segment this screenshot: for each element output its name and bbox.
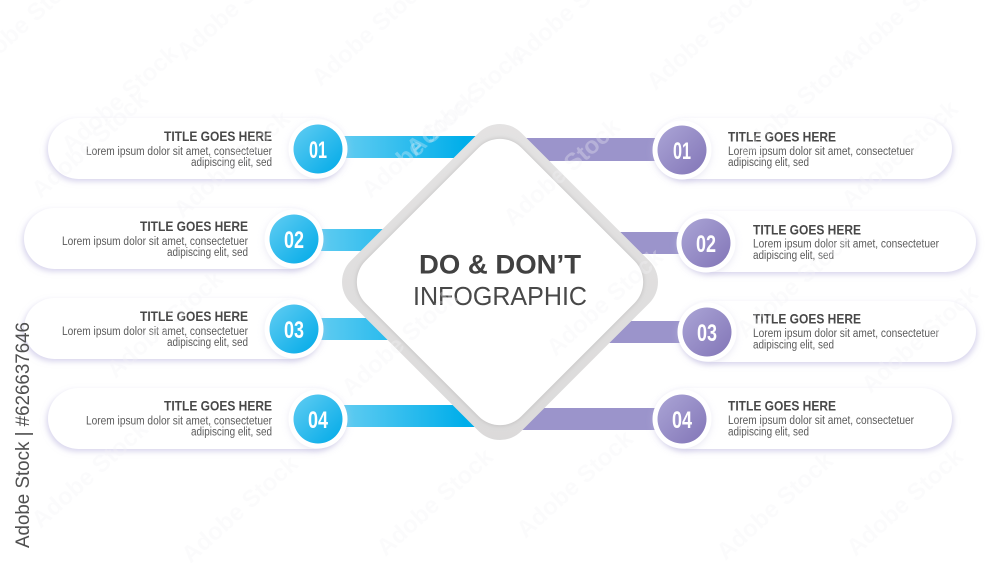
text: left 04: Lorem ipsum dolor sit amet, consectetuer <box>86 416 272 428</box>
panel: left item 04 <box>48 388 500 449</box>
connector bar: right 03 <box>500 321 684 343</box>
watermark pattern: Adobe Stock <box>168 105 296 224</box>
heading: do and don't: DO & DON’T <box>419 250 582 280</box>
text: left 02 <box>62 218 248 259</box>
watermark pattern: Adobe Stock <box>26 415 154 534</box>
badge: right 03: 03 <box>697 320 717 347</box>
text: right 02 <box>753 222 939 262</box>
text: right 04 <box>728 398 914 438</box>
connector bar: left 03 <box>316 318 500 340</box>
panel: right item 03 <box>500 301 976 362</box>
badge: left 02: 02 <box>284 227 304 254</box>
text: right 01: TITLE GOES HERE <box>728 128 836 144</box>
text: left 01: TITLE GOES HERE <box>164 128 272 144</box>
text: right 02: adipiscing elit, sed <box>753 250 834 262</box>
watermark pattern: Adobe Stock <box>841 443 969 562</box>
badge: left 03: 03 <box>284 317 304 344</box>
text: right 01: adipiscing elit, sed <box>728 157 809 169</box>
watermark pattern: Adobe Stock <box>371 443 499 562</box>
text: left 04: adipiscing elit, sed <box>191 426 272 438</box>
connector bar: right 04 <box>500 408 660 430</box>
badge: right 04 <box>652 390 712 448</box>
text: left 04: TITLE GOES HERE <box>164 398 272 414</box>
text: right 04: adipiscing elit, sed <box>728 426 809 438</box>
watermark pattern: Adobe Stock <box>56 40 184 159</box>
watermark pattern: Adobe Stock <box>836 95 964 214</box>
text: left 01: adipiscing elit, sed <box>191 157 272 169</box>
text: right 03: Lorem ipsum dolor sit amet, consectetuer <box>753 328 939 340</box>
text: left 03 <box>62 308 248 349</box>
text: left 02: Lorem ipsum dolor sit amet, consectetuer <box>62 236 248 248</box>
connector bar: left 02 <box>316 229 500 251</box>
panel: left item 01 <box>48 118 500 179</box>
badge: left 01: 01 <box>309 137 327 164</box>
panel: right item 04 <box>500 388 952 449</box>
watermark pattern: Adobe Stock <box>541 243 669 362</box>
subheading: infographic: INFOGRAPHIC <box>413 283 587 311</box>
text: left 01: Lorem ipsum dolor sit amet, consectetuer <box>86 146 272 158</box>
badge: left 02 <box>264 210 324 268</box>
watermark pattern: Adobe Stock <box>731 225 859 344</box>
badge: right 01 <box>652 120 712 180</box>
pill: right 01 <box>654 118 952 179</box>
pill: right 04 <box>654 388 952 449</box>
panel: right item 02 <box>500 211 976 272</box>
watermark pattern: Adobe Stock <box>336 283 464 402</box>
pill: left 01 <box>48 118 346 179</box>
text: right 02: TITLE GOES HERE <box>753 222 861 238</box>
pill: left 04 <box>48 388 346 449</box>
badge: right 02: 02 <box>696 231 716 258</box>
pill: left 03 <box>24 298 322 359</box>
text: right 04: Lorem ipsum dolor sit amet, consectetuer <box>728 415 914 427</box>
pill: right 02 <box>678 211 976 272</box>
diamond face <box>344 126 656 438</box>
badge: right 01: 01 <box>673 138 691 165</box>
panel: right item 01 <box>500 118 952 180</box>
panel: left item 02 <box>24 208 500 269</box>
watermark pattern: Adobe Stock <box>26 85 154 204</box>
badge: right 02 <box>676 214 736 272</box>
text: right 02: Lorem ipsum dolor sit amet, consectetuer <box>753 238 939 250</box>
text: right 01 <box>728 128 914 169</box>
watermark pattern: Adobe Stock <box>498 113 626 232</box>
text: left 02: TITLE GOES HERE <box>140 218 248 234</box>
text: right 01: Lorem ipsum dolor sit amet, consectetuer <box>728 146 914 158</box>
text: left 04 <box>86 398 272 438</box>
watermark pattern: Adobe Stock <box>511 425 639 544</box>
watermark pattern: Adobe Stock <box>731 47 859 166</box>
pill: right 03 <box>678 301 976 362</box>
text: right 03: adipiscing elit, sed <box>753 340 834 352</box>
watermark pattern: Adobe Stock <box>401 43 529 162</box>
watermark pattern: Adobe Stock <box>856 280 984 399</box>
badge: right 04: 04 <box>672 407 692 434</box>
badge: left 04 <box>288 390 348 448</box>
connector bar: right 02 <box>500 232 684 254</box>
badge: left 01 <box>288 120 348 178</box>
text: left 03: Lorem ipsum dolor sit amet, consectetuer <box>62 326 248 338</box>
connector bar: right 01 <box>500 138 660 161</box>
connector bar: left 01 <box>340 136 500 158</box>
watermark pattern: Adobe Stock <box>101 265 229 384</box>
badge: left 04: 04 <box>308 407 328 434</box>
badge: left 03 <box>264 300 324 358</box>
text: left 01 <box>86 128 272 169</box>
text: right 04: TITLE GOES HERE <box>728 398 836 414</box>
badge: right 03 <box>678 302 736 362</box>
text: left 03: TITLE GOES HERE <box>140 308 248 324</box>
pill: left 02 <box>24 208 322 269</box>
watermark pattern: Adobe Stock <box>356 85 484 204</box>
panel: left item 03 <box>24 298 500 359</box>
stock id side label: Adobe Stock | #626637646 <box>13 322 34 548</box>
diamond frame <box>330 112 670 452</box>
text: right 03 <box>753 310 939 352</box>
text: left 02: adipiscing elit, sed <box>167 247 248 259</box>
watermark pattern: Adobe Stock <box>711 447 839 563</box>
text: left 03: adipiscing elit, sed <box>167 337 248 349</box>
connector bar: left 04 <box>340 405 500 427</box>
center diamond <box>330 112 670 452</box>
text: right 03: TITLE GOES HERE <box>753 310 861 326</box>
